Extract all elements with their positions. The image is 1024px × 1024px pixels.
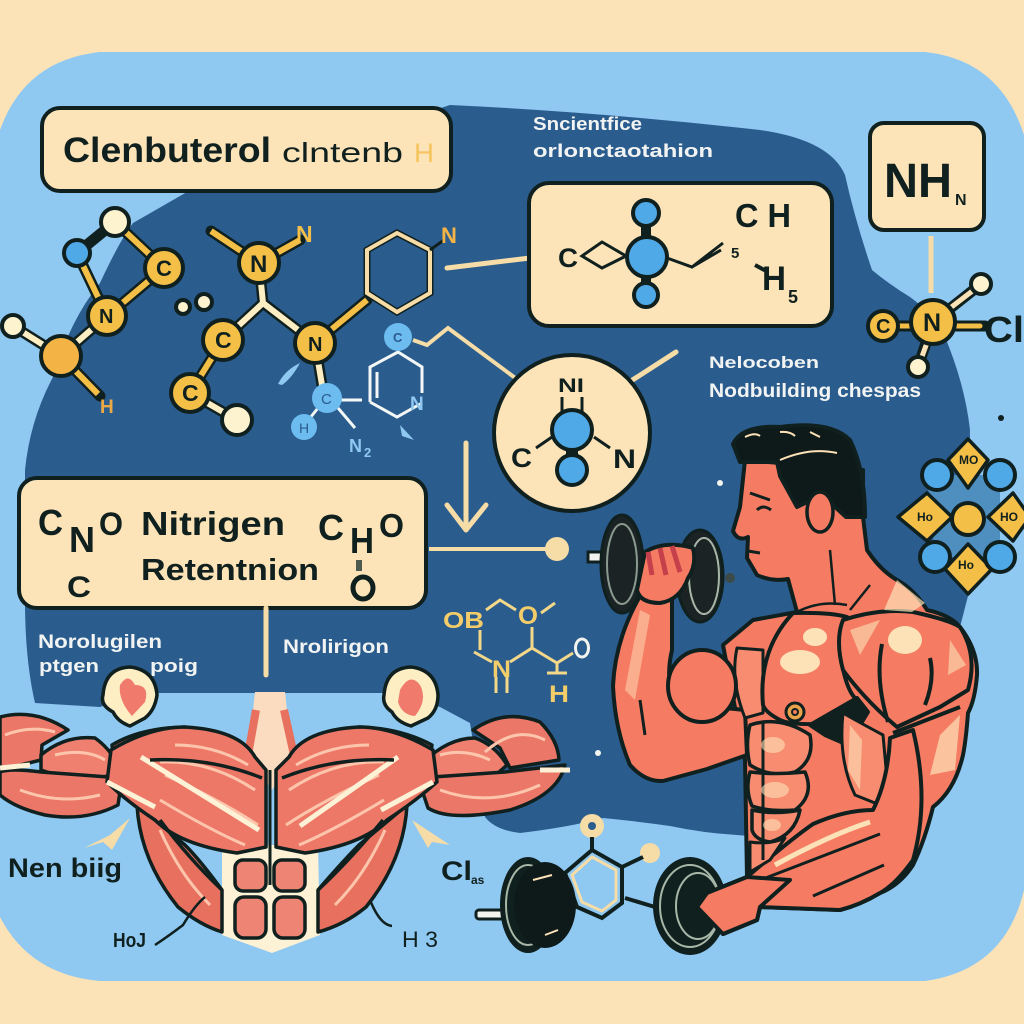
chest left edge bbox=[735, 648, 763, 718]
hair bbox=[733, 425, 865, 517]
icon: circle molecule: C bbox=[511, 443, 532, 473]
icon: blue ring molecule: C bbox=[321, 391, 332, 408]
text: nodebuilding label: Nelocoben bbox=[709, 353, 819, 372]
heading: Clenbuterol: clntenb bbox=[282, 137, 403, 168]
illustration: raised forearm shading bbox=[640, 700, 645, 735]
icon: molecule C-N-Cl: Cl bbox=[984, 309, 1024, 350]
panel: Nitrogen Retention: C bbox=[318, 507, 344, 548]
neck folds bbox=[797, 550, 870, 612]
muscle fibres bbox=[5, 729, 545, 905]
eye and mouth bbox=[748, 493, 771, 553]
raised forearm bbox=[613, 596, 747, 781]
heading: Clenbuterol bbox=[42, 108, 451, 191]
icon: central molecule: N bbox=[296, 221, 313, 247]
icon: central molecule: C bbox=[215, 327, 232, 353]
text: lower labels: as bbox=[471, 873, 485, 887]
icon: yellow ring molecule: O bbox=[518, 602, 538, 630]
icon: left node bbox=[102, 667, 157, 726]
panel: Nitrogen Retention: C bbox=[38, 502, 63, 543]
icon: diamond molecule: Ho bbox=[958, 558, 974, 572]
highlights bbox=[625, 580, 966, 831]
illustration: gripping hand bbox=[697, 877, 790, 934]
cream abdomen base bbox=[222, 845, 320, 953]
icon: central molecule: C bbox=[182, 380, 199, 406]
right arm bbox=[473, 717, 559, 768]
abs bbox=[748, 722, 811, 774]
icon: circle molecule bbox=[494, 352, 676, 511]
icon: blue ring molecule: N bbox=[410, 394, 424, 415]
panel: Nitrogen Retention: O bbox=[379, 507, 404, 544]
decorative dots bbox=[595, 415, 1004, 756]
panel: Nitrogen Retention: Retentnion bbox=[141, 552, 319, 587]
right lats bbox=[318, 805, 407, 932]
upper trapezius left bbox=[112, 727, 185, 765]
icon: blue ring molecule bbox=[278, 323, 518, 460]
icon: blue ring molecule: 2 bbox=[364, 445, 371, 460]
bicep bbox=[668, 650, 736, 722]
left arm bbox=[0, 714, 68, 770]
text: nodebuilding label: Nodbuilding chespas bbox=[709, 381, 921, 402]
icon: blue ring molecule: N bbox=[349, 436, 362, 456]
icon: central molecule bbox=[171, 221, 457, 435]
body silhouette bbox=[697, 460, 977, 934]
icon: left molecule: N bbox=[99, 306, 113, 328]
icon: molecule C-N-Cl: N bbox=[923, 309, 941, 337]
heading: Clenbuterol: Clenbuterol bbox=[63, 131, 271, 170]
arrow: down bbox=[447, 443, 486, 530]
icon: blue ring molecule: H bbox=[299, 420, 309, 436]
icon: yellow ring molecule: H bbox=[549, 681, 569, 708]
icon: diamond molecule: Ho bbox=[917, 510, 933, 524]
icon: central molecule: N bbox=[250, 251, 267, 278]
text: nitrogen labels: Norolugilen bbox=[38, 632, 162, 653]
icon: lower dumbbell and hexagon bbox=[476, 814, 727, 955]
left pectoral bbox=[107, 727, 266, 853]
panel: Nitrogen Retention: C bbox=[67, 571, 91, 604]
icon: left molecule: C bbox=[156, 256, 172, 281]
abdominal blocks bbox=[235, 860, 266, 891]
text: nodebuilding label bbox=[709, 353, 921, 402]
text: lower labels: Nen biig bbox=[8, 853, 122, 883]
text: nitrogen labels: poig bbox=[150, 656, 198, 676]
icon: central molecule: N bbox=[308, 334, 322, 356]
icon: right node bbox=[384, 667, 438, 726]
icon: raised dumbbell bbox=[588, 515, 735, 622]
text: scientific label: Sncientfice bbox=[533, 114, 642, 134]
icon: circle molecule: N bbox=[613, 444, 636, 474]
connector: to dumbbell bbox=[429, 537, 569, 561]
icon: molecule C-N-Cl: C bbox=[876, 316, 890, 338]
text: lower labels: HoJ bbox=[113, 930, 146, 952]
panel: dark blue blob bbox=[25, 105, 970, 840]
icon: diamond molecule: HO bbox=[1000, 510, 1018, 524]
dark fold under pec bbox=[810, 698, 868, 745]
text: nitrogen labels bbox=[38, 608, 389, 676]
panel: NH callout: NH bbox=[884, 155, 952, 208]
panel: C-H5 callout: 5 bbox=[788, 287, 798, 307]
icon: molecule C-N-Cl bbox=[868, 236, 1024, 377]
panel: NH callout bbox=[870, 123, 984, 230]
icon: blue ring molecule: C bbox=[393, 330, 403, 345]
upper trapezius right bbox=[359, 727, 432, 765]
panel: C-H5 callout: C H bbox=[735, 197, 791, 234]
panel: C-H5 callout: 5 bbox=[731, 245, 739, 262]
heading: Clenbuterol: H bbox=[414, 138, 434, 168]
panel: Nitrogen Retention: Nitrigen bbox=[141, 505, 285, 542]
illustration: muscle torso diagram bbox=[0, 692, 570, 953]
left lats bbox=[137, 805, 222, 932]
text: scientific label bbox=[533, 114, 713, 161]
icon: diamond molecule bbox=[898, 439, 1024, 594]
panel: C-H5 callout: H bbox=[762, 260, 786, 298]
panel: Nitrogen Retention: N bbox=[69, 519, 95, 560]
text: nitrogen labels: Nrolirigon bbox=[283, 637, 389, 658]
ear bbox=[807, 492, 833, 532]
text: nitrogen labels: ptgen bbox=[39, 656, 99, 676]
text: lower labels bbox=[8, 818, 485, 952]
panel: C-H5 callout: C bbox=[558, 243, 578, 273]
nipple bbox=[786, 703, 804, 721]
panel: C-H5 callout bbox=[447, 183, 832, 326]
oblique bbox=[842, 713, 888, 803]
text: lower labels: H 3 bbox=[402, 927, 438, 952]
icon: yellow ring molecule: N bbox=[492, 656, 511, 683]
panel: Nitrogen Retention: H bbox=[350, 520, 374, 561]
text: lower labels: Cl bbox=[441, 856, 472, 886]
panel: Nitrogen Retention: O bbox=[99, 506, 123, 542]
illustration: bodybuilder bbox=[613, 425, 977, 934]
lower arm bbox=[697, 730, 922, 934]
icon: circle molecule: NI bbox=[558, 376, 584, 397]
deltoid bbox=[839, 611, 972, 727]
text: scientific label: orlonctaotahion bbox=[533, 141, 713, 161]
neck bbox=[248, 692, 292, 790]
icon: yellow ring molecule bbox=[443, 600, 588, 708]
right pectoral bbox=[276, 727, 437, 853]
icon: central molecule: N bbox=[441, 223, 457, 248]
icon: yellow ring molecule: OB bbox=[443, 607, 484, 633]
icon: left molecule: H bbox=[100, 397, 114, 418]
icon: diamond molecule: MO bbox=[959, 453, 978, 467]
panel: NH callout: N bbox=[955, 192, 967, 209]
hand bbox=[637, 545, 694, 603]
icon: left molecule bbox=[2, 208, 212, 418]
left pectoral bbox=[762, 613, 857, 724]
panel: Nitrogen Retention bbox=[19, 478, 426, 608]
